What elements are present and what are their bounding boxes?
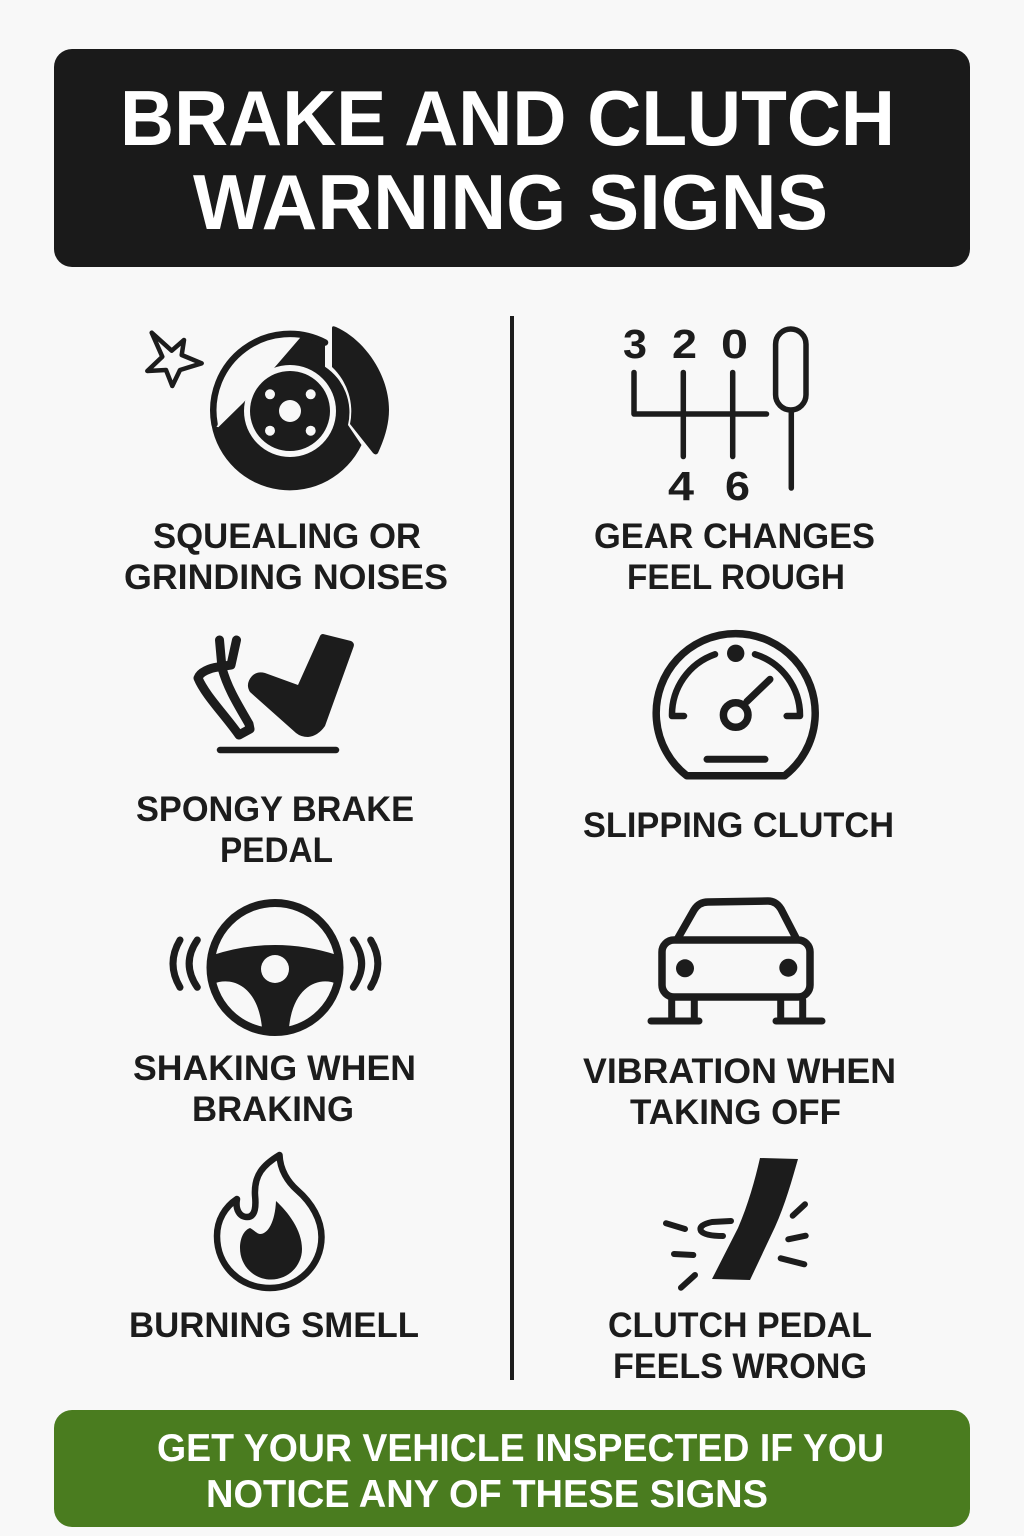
label: [594, 517, 875, 597]
label: BURNING SMELL: [129, 1306, 419, 1345]
panel: gear changes feel rough: [594, 321, 875, 597]
icon: gear shift pattern: 2: [672, 321, 697, 367]
label: [583, 1052, 896, 1132]
label: CLUTCH PEDAL: [608, 1306, 872, 1345]
center divider: [510, 316, 514, 1380]
label: FEEL ROUGH: [627, 558, 845, 597]
panel: burning smell: [129, 1155, 419, 1345]
label: PEDAL: [220, 831, 333, 870]
icon: gear shift pattern: 0: [721, 321, 748, 367]
label: BRAKING: [192, 1090, 354, 1129]
icon: foot on pedal: [198, 634, 354, 750]
panel: vibration when taking off: [583, 901, 896, 1132]
icon: steering wheel: [173, 903, 378, 1032]
label: GEAR CHANGES: [594, 517, 875, 556]
label: SLIPPING CLUTCH: [583, 806, 894, 845]
callout text: [157, 1427, 884, 1516]
label: GRINDING NOISES: [124, 558, 448, 597]
panel: spongy brake pedal: [136, 634, 414, 870]
label: SHAKING WHEN: [133, 1049, 416, 1088]
icon: gear shift pattern: 3: [623, 321, 647, 367]
callout banner: [54, 1410, 970, 1527]
label: [124, 517, 448, 597]
title: WARNING SIGNS: [193, 158, 828, 246]
label: [136, 790, 414, 870]
title: [120, 74, 895, 246]
label: SPONGY BRAKE: [136, 790, 414, 829]
panel: shaking when braking: [133, 903, 416, 1129]
label: [608, 1306, 872, 1386]
panel: clutch pedal feels wrong: [608, 1158, 872, 1386]
icon: gear shift pattern: [623, 321, 806, 509]
label: FEELS WRONG: [613, 1347, 867, 1386]
title: BRAKE AND CLUTCH: [120, 74, 895, 162]
panel: squealing or grinding noises: [124, 326, 448, 597]
label: VIBRATION WHEN: [583, 1052, 896, 1091]
icon: gauge: [656, 634, 815, 776]
label: TAKING OFF: [630, 1093, 841, 1132]
icon: car front: [651, 901, 822, 1021]
icon: gear shift pattern: 4: [668, 463, 694, 509]
callout text: GET YOUR VEHICLE INSPECTED IF YOU: [157, 1427, 884, 1470]
callout text: NOTICE ANY OF THESE SIGNS: [206, 1473, 768, 1516]
icon: flame: [217, 1155, 322, 1288]
title banner: [54, 49, 970, 267]
icon: brake disc with spark: [147, 326, 389, 490]
icon: clutch pedal with motion marks: [666, 1158, 806, 1288]
panel: slipping clutch: [583, 634, 894, 845]
icon: gear shift pattern: 6: [725, 463, 750, 509]
label: SQUEALING OR: [153, 517, 421, 556]
label: [133, 1049, 416, 1129]
